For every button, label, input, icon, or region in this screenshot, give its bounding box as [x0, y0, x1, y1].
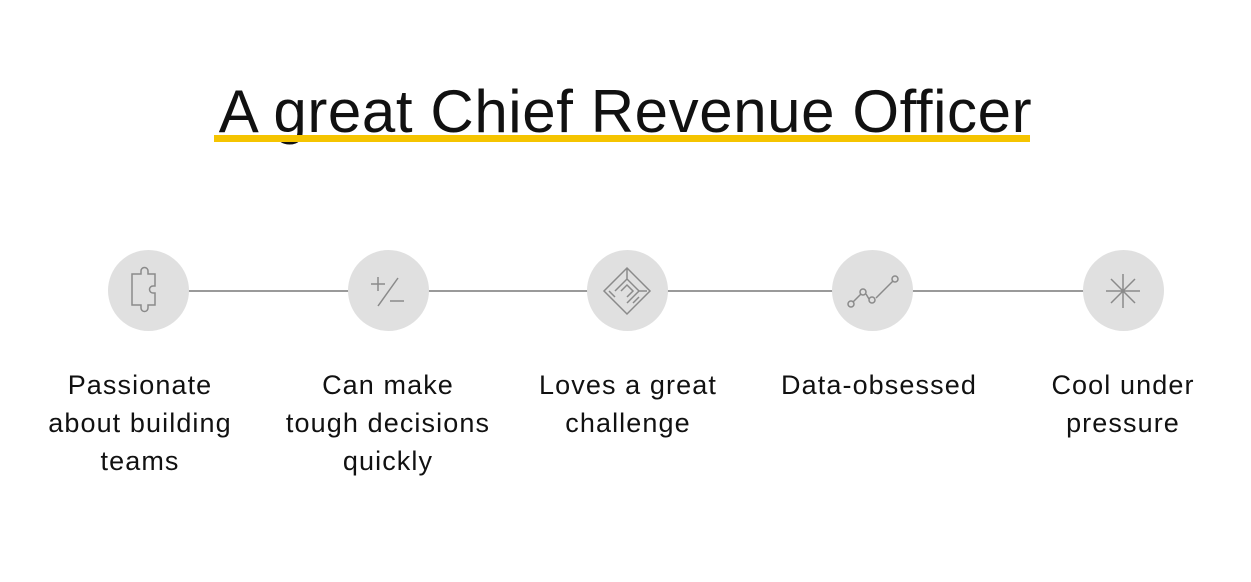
connector line: [148, 290, 1123, 292]
label: challenge: [539, 370, 717, 438]
icon: asterisk: [1083, 250, 1164, 331]
label: decisions: [286, 370, 490, 476]
icon: maze: [587, 250, 668, 331]
icon: puzzle: [108, 250, 189, 331]
title: A great Chief Revenue Officer: [219, 78, 1032, 145]
label: pressure: [1051, 370, 1195, 438]
icon: plus minus: [348, 250, 429, 331]
title underline: [214, 135, 1030, 142]
label: pressure: pressure: [1066, 408, 1180, 438]
label: challenge: Loves a great: [539, 370, 717, 400]
label: teams: teams: [100, 446, 180, 476]
label: decisions: tough decisions: [286, 408, 490, 438]
label: decisions: quickly: [343, 446, 433, 476]
label: teams: Passionate: [68, 370, 212, 400]
label: data: Data-obsessed: [781, 370, 977, 400]
icon: data line: [832, 250, 913, 331]
label: decisions: Can make: [322, 370, 454, 400]
label: teams: about building: [48, 408, 232, 438]
label: pressure: Cool under: [1051, 370, 1195, 400]
label: challenge: challenge: [565, 408, 691, 438]
label: teams: [48, 370, 232, 476]
